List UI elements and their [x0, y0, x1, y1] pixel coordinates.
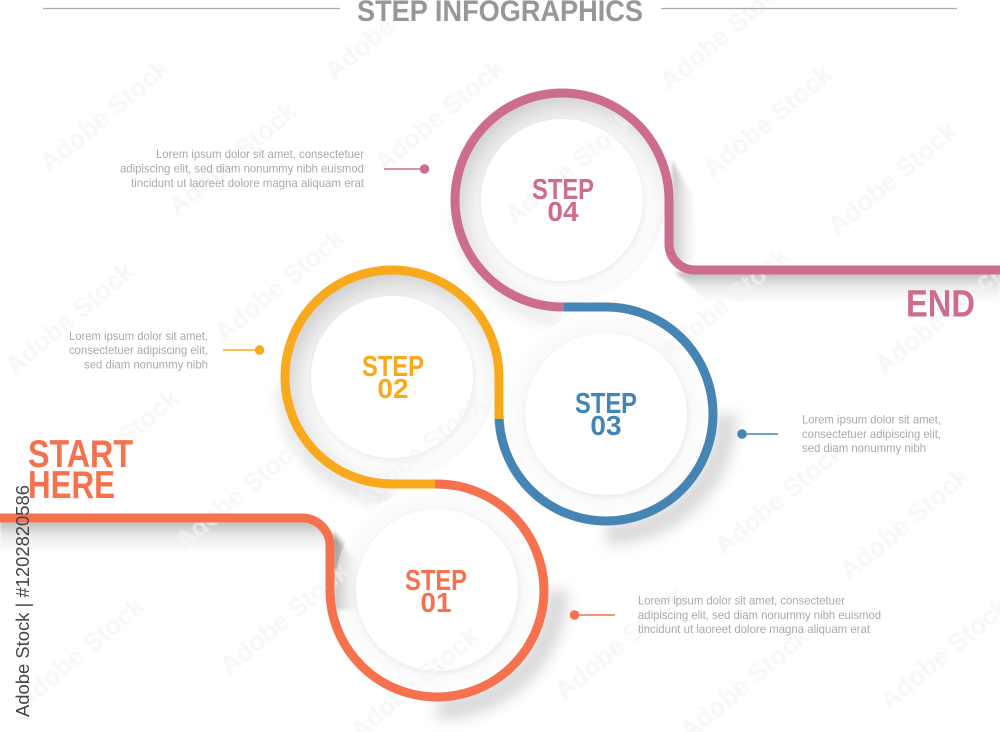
text block: step 03: sed diam nonummy nibh	[802, 442, 926, 455]
watermark pattern: Adobe Stock	[34, 52, 175, 178]
start here label: HERE	[28, 464, 115, 507]
text block: step 04	[120, 148, 365, 190]
watermark pattern: Adobe Stock	[654, 240, 795, 366]
end label: END	[906, 284, 975, 326]
step 01 label: 01	[420, 587, 452, 618]
text block: step 02: Lorem ipsum dolor sit amet,	[69, 330, 208, 343]
text block: step 02: consectetuer adipiscing elit,	[69, 344, 208, 357]
connector: step 01	[570, 610, 615, 620]
step 04 label: STEP	[532, 174, 594, 206]
watermark pattern: Adobe Stock	[349, 388, 490, 514]
start here label: START	[28, 433, 133, 476]
connector: step 04	[384, 164, 429, 174]
watermark pattern: Adobe Stock	[209, 222, 350, 348]
text block: step 02: sed diam nonummy nibh	[84, 358, 208, 372]
step 02 disc	[289, 274, 495, 480]
text block: step 04: Lorem ipsum dolor sit amet, consectetuer	[156, 148, 364, 161]
watermark pattern: Adobe Stock	[549, 580, 690, 706]
path: step 02 yellow	[285, 270, 499, 484]
step 02 label	[362, 351, 424, 404]
watermark pattern: Adobe Stock	[214, 555, 355, 681]
path: step 03 blue	[499, 307, 713, 521]
text block: step 03: Lorem ipsum dolor sit amet,	[802, 414, 941, 426]
step 03 label: 03	[590, 410, 622, 441]
start here label	[28, 433, 133, 507]
watermark pattern: Adobe Stock	[822, 115, 963, 241]
watermark pattern: Adobe Stock	[709, 435, 850, 561]
stock id vertical text: Adobe Stock | #1202820586	[12, 485, 33, 717]
connector: step 02	[223, 345, 264, 355]
step 01 label: STEP	[405, 565, 467, 597]
text block: step 03: consectetuer adipiscing elit,	[802, 428, 941, 441]
step 03 disc	[503, 311, 709, 517]
path: step 04 pink	[455, 93, 1000, 307]
step 01 label	[405, 565, 467, 618]
step 03 label	[575, 388, 637, 441]
watermark pattern: Adobe Stock	[834, 460, 975, 586]
step 04 label: 04	[547, 196, 579, 227]
text block: step 01: tincidunt ut laoreet dolore magna aliquam erat	[638, 623, 871, 636]
watermark pattern: Adobe Stock	[369, 52, 510, 178]
step 02 label: STEP	[362, 351, 424, 383]
step 04 disc	[459, 97, 665, 303]
text block: step 01: adipiscing elit, sed diam nonummy nibh euismod	[638, 609, 881, 622]
text block: step 04: tincidunt ut laoreet dolore magna aliquam erat	[131, 177, 365, 190]
watermark pattern: Adobe Stock	[499, 105, 640, 231]
watermark pattern: Adobe Stock	[169, 430, 310, 556]
text block: step 02	[69, 330, 208, 372]
text block: step 01: Lorem ipsum dolor sit amet, consectetuer	[638, 594, 845, 608]
watermark pattern: Adobe Stock	[162, 95, 303, 221]
step 01 disc	[334, 487, 540, 693]
step 04 label	[532, 174, 594, 227]
watermark pattern: Adobe Stock	[0, 255, 140, 381]
path shadows	[0, 160, 1000, 709]
watermark pattern: Adobe Stock	[697, 58, 838, 184]
watermark pattern: Adobe Stock	[44, 382, 185, 508]
step 03 label: STEP	[575, 388, 637, 420]
path: step 01 orange	[0, 484, 544, 697]
step 02 label: 02	[377, 373, 409, 404]
text block: step 01	[638, 594, 881, 636]
connector: step 03	[737, 429, 778, 439]
watermark pattern: Adobe Stock	[9, 590, 150, 716]
text block: step 04: adipiscing elit, sed diam nonummy nibh euismod	[120, 162, 364, 176]
text block: step 03	[802, 414, 941, 455]
